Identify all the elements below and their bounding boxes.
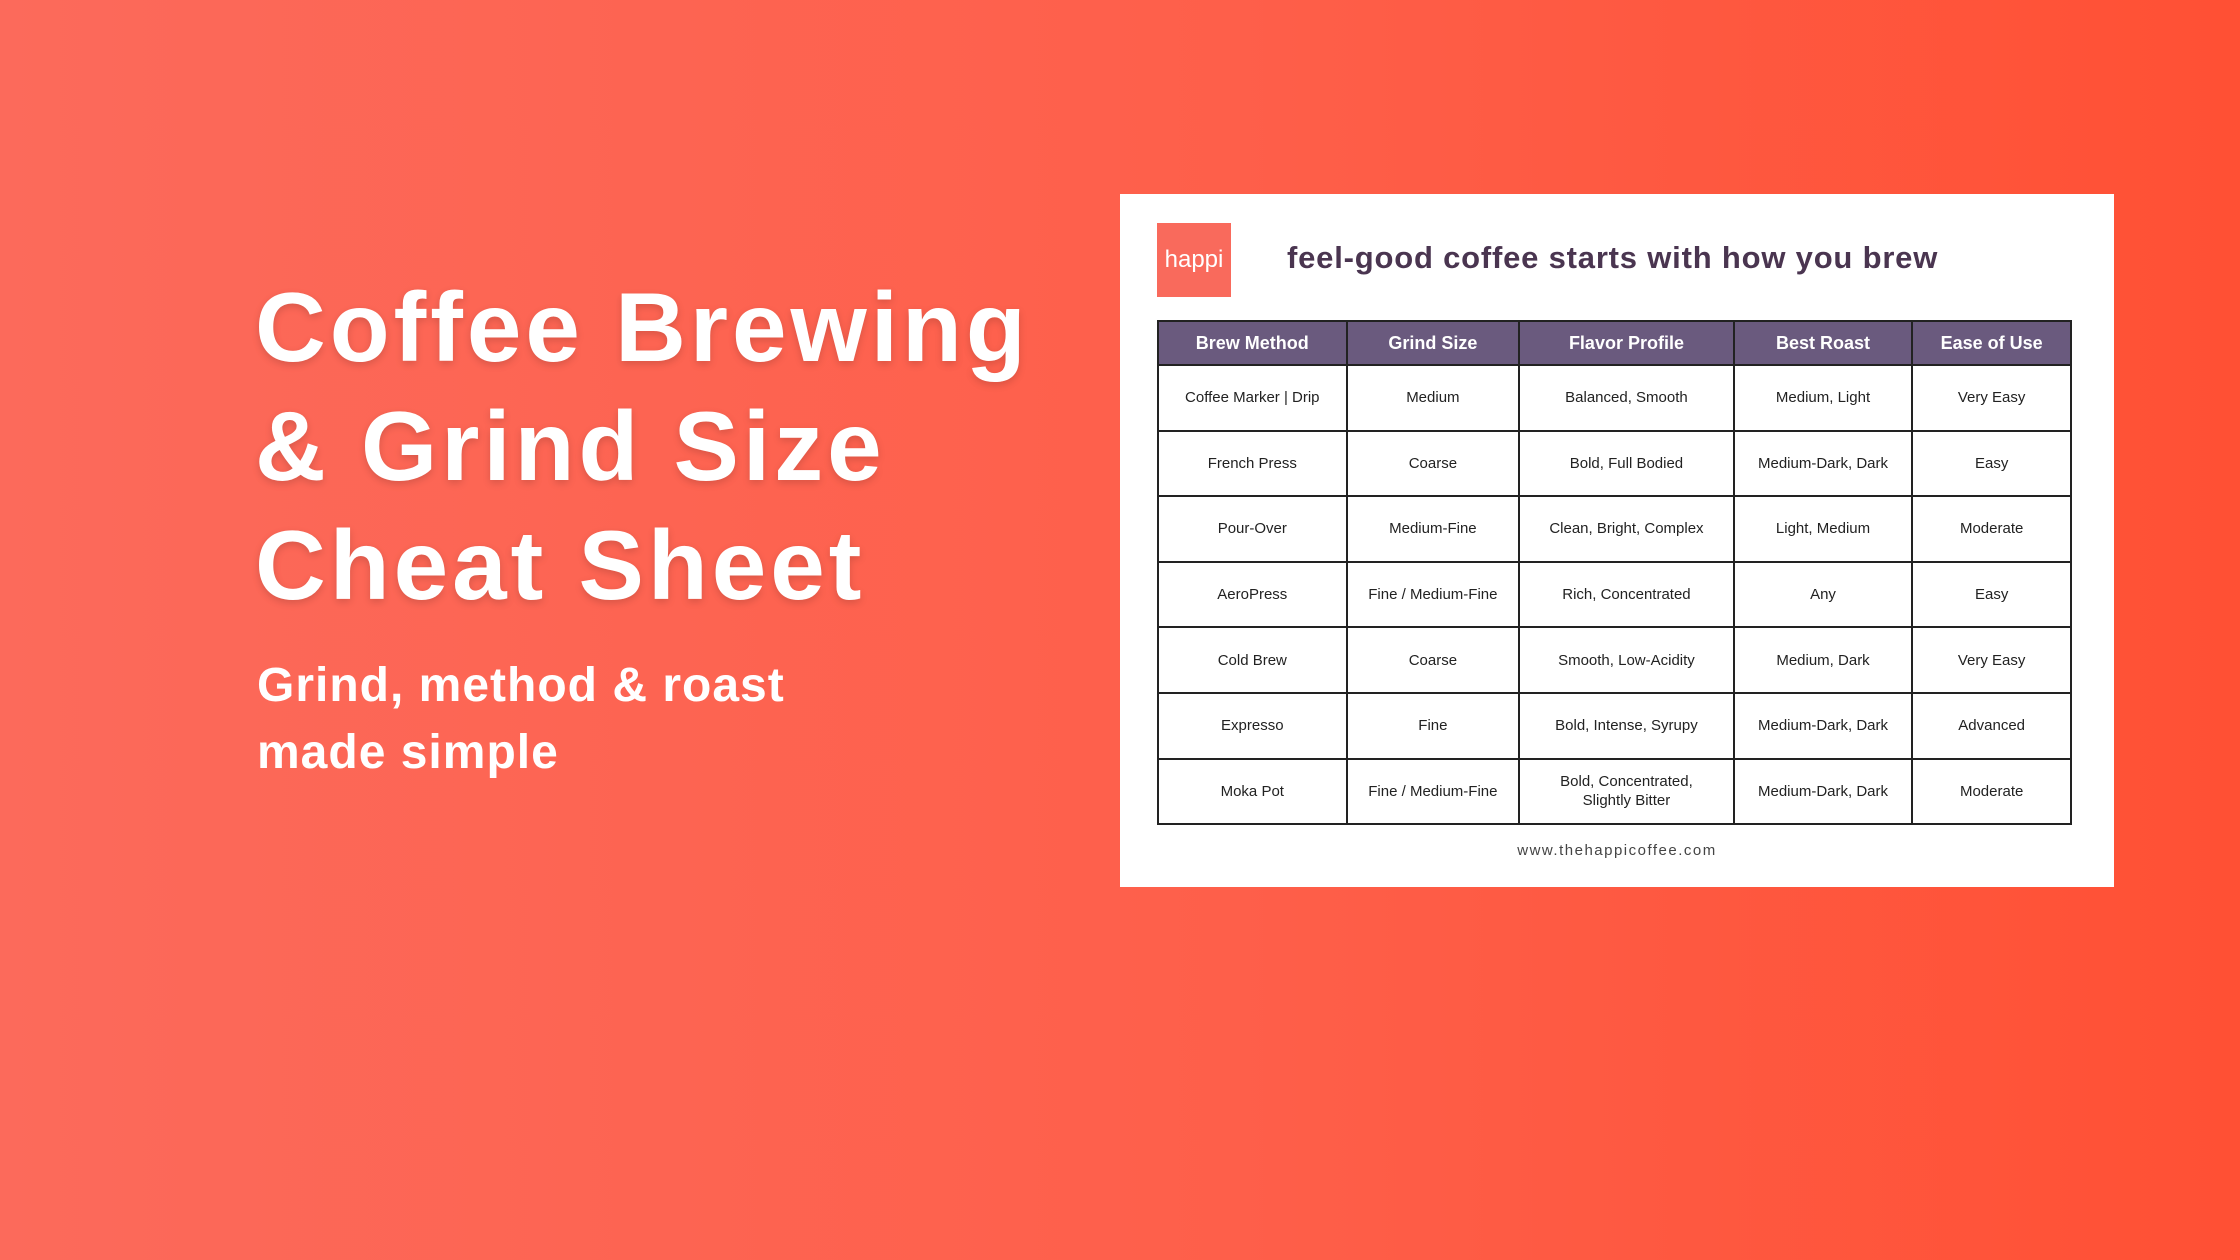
table: brewing methods: Coffee Marker | Drip (1185, 389, 1320, 406)
table: brewing methods: Light, Medium (1776, 520, 1870, 537)
subtitle: Grind, method & roast (257, 659, 785, 712)
table: brewing methods: Fine / Medium-Fine (1368, 586, 1497, 603)
table: brewing methods: Medium-Dark, Dark (1758, 455, 1888, 472)
table: brewing methods: Balanced, Smooth (1565, 389, 1688, 406)
table: brewing methods: Very Easy (1958, 389, 2025, 406)
card heading: feel-good coffee starts with how you brew (1287, 240, 1938, 275)
title: Coffee Brewing (255, 272, 1030, 382)
icon: happi logo (1157, 223, 1231, 297)
icon: happi logo: happi (1165, 246, 1223, 273)
table: brewing methods: Medium-Fine (1389, 520, 1477, 537)
table: brewing methods: Any (1810, 586, 1836, 603)
footer url: www.thehappicoffee.com (1517, 842, 1717, 859)
table: brewing methods: Advanced (1958, 717, 2025, 734)
table: brewing methods: Ease of Use (1941, 332, 2043, 352)
title (255, 272, 1030, 620)
table: brewing methods: Easy (1975, 455, 2008, 472)
table: brewing methods: Coarse (1409, 652, 1457, 669)
table: brewing methods: Easy (1975, 586, 2008, 603)
table: brewing methods: AeroPress (1217, 586, 1287, 603)
table: brewing methods: Medium-Dark, Dark (1758, 717, 1888, 734)
table: brewing methods: Bold, Concentrated, (1560, 773, 1693, 790)
table: brewing methods: Smooth, Low-Acidity (1558, 652, 1695, 669)
table: brewing methods: Medium, Dark (1776, 652, 1870, 669)
table: brewing methods: Expresso (1221, 717, 1284, 734)
table: brewing methods: Pour-Over (1218, 520, 1287, 537)
table: brewing methods: Slightly Bitter (1583, 792, 1670, 809)
table: brewing methods: Fine / Medium-Fine (1368, 783, 1497, 800)
table: brewing methods: Brew Method (1196, 332, 1309, 352)
title: Cheat Sheet (255, 510, 865, 620)
title: & Grind Size (255, 391, 886, 501)
table: brewing methods: Moderate (1960, 783, 2023, 800)
table: brewing methods: Bold, Full Bodied (1570, 455, 1683, 472)
table: brewing methods: Flavor Profile (1569, 332, 1684, 352)
table: brewing methods: Cold Brew (1218, 652, 1287, 669)
table: brewing methods: Moderate (1960, 520, 2023, 537)
panel: cheat sheet card (1120, 194, 2114, 887)
table: brewing methods: Medium, Light (1776, 389, 1870, 406)
subtitle (257, 659, 785, 779)
table: brewing methods: Bold, Intense, Syrupy (1555, 717, 1698, 734)
table: brewing methods: Rich, Concentrated (1562, 586, 1691, 603)
table: brewing methods: Very Easy (1958, 652, 2025, 669)
table: brewing methods: Best Roast (1776, 332, 1870, 352)
table: brewing methods (1157, 320, 2072, 825)
table: brewing methods: Medium-Dark, Dark (1758, 783, 1888, 800)
table: brewing methods: Fine (1418, 717, 1447, 734)
table: brewing methods: Moka Pot (1221, 783, 1284, 800)
table: brewing methods: Medium (1406, 389, 1460, 406)
table: brewing methods: Grind Size (1388, 332, 1477, 352)
table: brewing methods: Coarse (1409, 455, 1457, 472)
table: brewing methods: Clean, Bright, Complex (1549, 520, 1704, 537)
table: brewing methods: French Press (1208, 455, 1297, 472)
subtitle: made simple (257, 726, 559, 779)
